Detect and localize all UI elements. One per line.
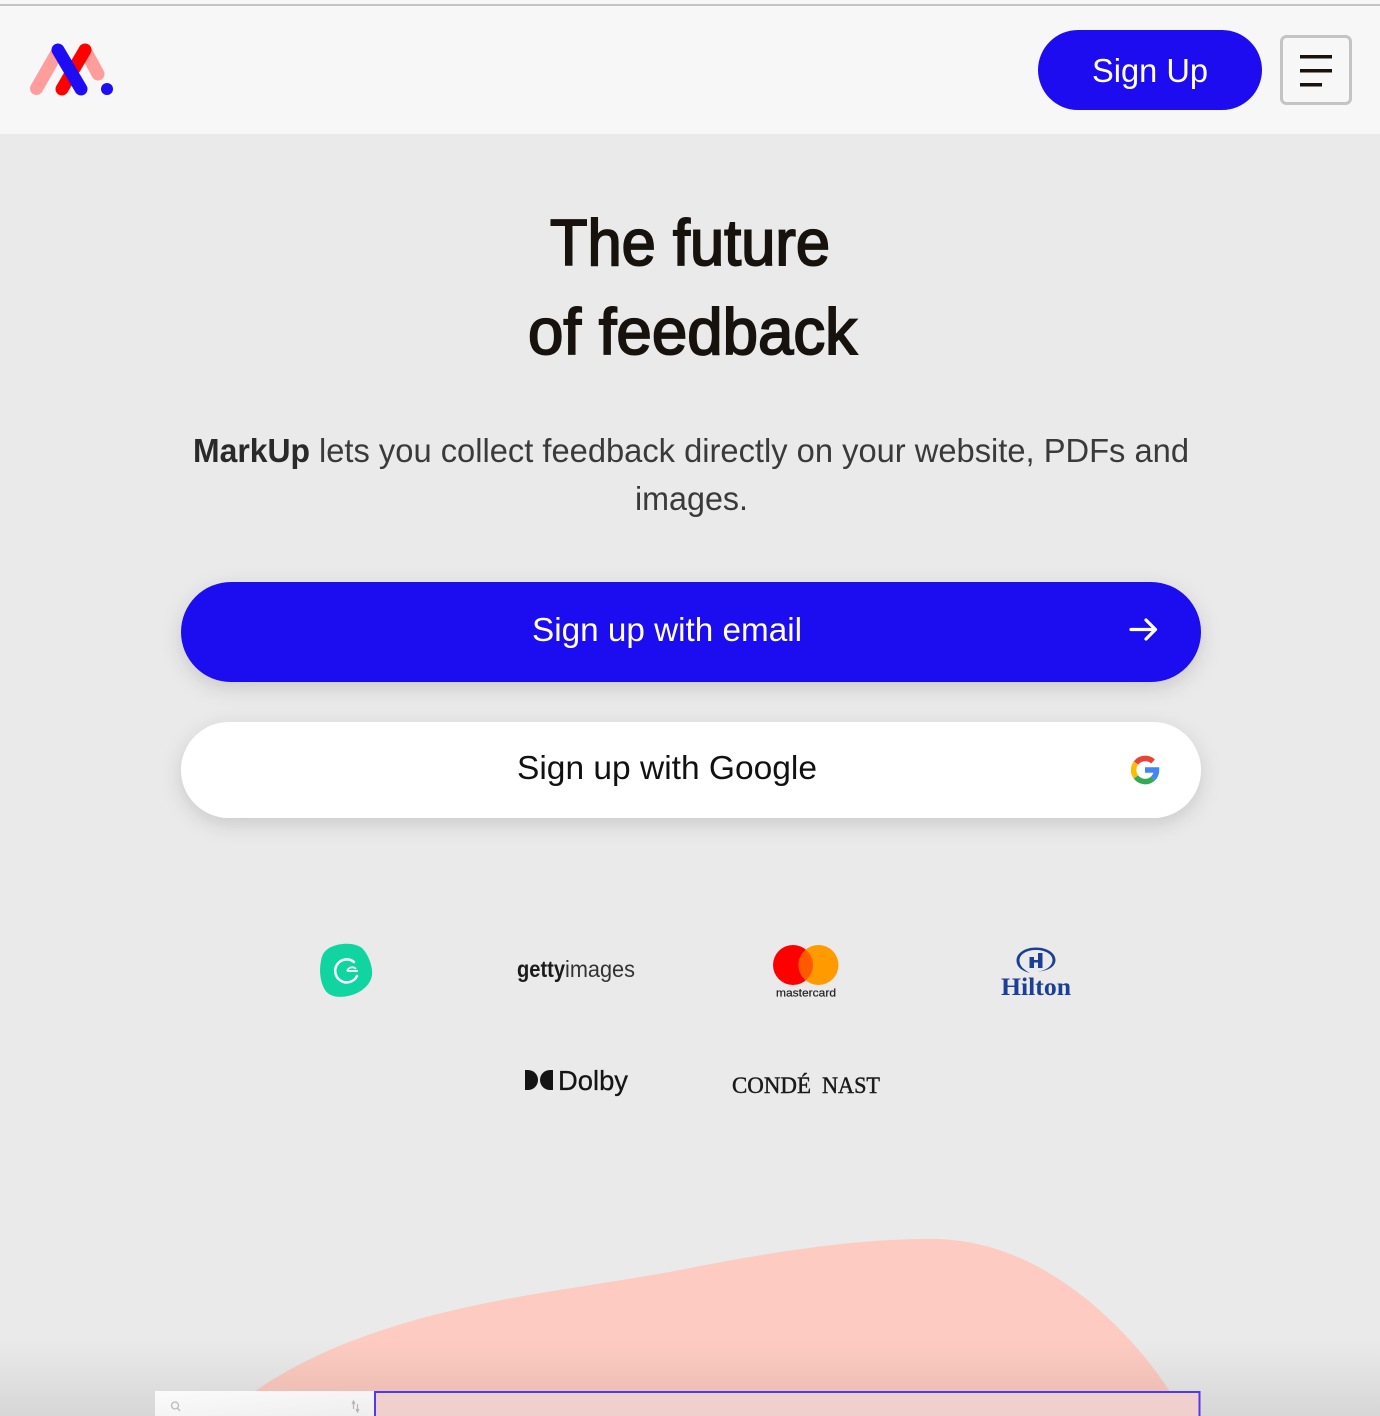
logo: Mastercard xyxy=(773,945,838,1000)
logo: Dolby xyxy=(525,1065,628,1096)
button: sign up with email xyxy=(181,582,1201,682)
logo: Hilton xyxy=(1001,948,1071,1001)
logo: Hilton: Hilton xyxy=(1001,974,1071,1001)
logo: Getty Images: images xyxy=(565,956,635,982)
mockup shadow xyxy=(0,1340,1380,1416)
button: sign up with Google: Sign up with Google xyxy=(517,749,817,786)
icon: Google G xyxy=(1134,758,1157,782)
logo: Mastercard: mastercard xyxy=(776,988,836,1000)
header button: sign up: Sign Up xyxy=(1092,52,1208,89)
logo: Getty Images xyxy=(517,956,635,982)
header button: sign up xyxy=(1038,30,1262,110)
icon: search xyxy=(172,1402,180,1411)
intro paragraph xyxy=(193,432,1189,517)
intro paragraph: lets you collect feedback directly on your website, PDFs and xyxy=(319,432,1189,469)
mockup sidebar xyxy=(155,1391,374,1416)
header bar xyxy=(0,0,1380,134)
logo: Condé Nast: NAST xyxy=(822,1073,880,1098)
logo: Condé Nast: CONDÉ xyxy=(732,1073,811,1098)
logo: Grammarly xyxy=(320,944,372,997)
title xyxy=(528,206,857,368)
icon: arrow xyxy=(1131,620,1156,639)
button: sign up with Google xyxy=(181,722,1201,818)
title: The future xyxy=(550,206,830,279)
icon: sort arrows xyxy=(352,1401,359,1412)
logo: Condé Nast xyxy=(732,1073,880,1098)
icon: MarkUp logo xyxy=(36,50,113,95)
title: of feedback xyxy=(528,295,857,368)
mockup canvas selection xyxy=(374,1391,1201,1416)
logo: Dolby: Dolby xyxy=(558,1065,628,1096)
button: sign up with email: Sign up with email xyxy=(532,611,802,648)
intro paragraph: MarkUp xyxy=(193,432,310,469)
app mockup preview xyxy=(155,1391,1201,1416)
intro paragraph: images. xyxy=(635,480,748,517)
logo: Getty Images: getty xyxy=(517,956,565,982)
icon: menu button xyxy=(1282,36,1350,104)
decorative pink blob xyxy=(250,1239,1172,1395)
